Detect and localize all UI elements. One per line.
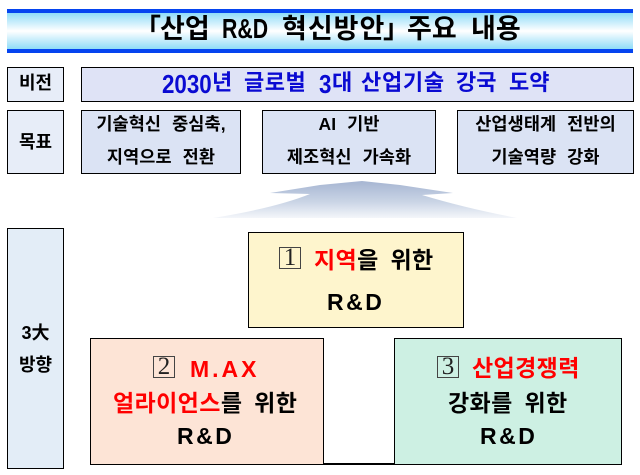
vision statement: 강국 bbox=[456, 70, 496, 95]
goal 2: AI 기반 bbox=[318, 114, 380, 134]
direction 1: regional R&D bbox=[248, 232, 464, 328]
label: vision bbox=[7, 67, 64, 102]
title banner: 주요 bbox=[407, 14, 457, 44]
vision statement: 산업기술 bbox=[361, 70, 445, 95]
vision statement: 2030 bbox=[162, 69, 212, 99]
direction 1: regional R&D: 지역을 위한 bbox=[314, 247, 434, 273]
title banner: R&D bbox=[222, 13, 268, 44]
direction 2: M.AX alliance R&D: 얼라이언스를 위한 bbox=[113, 390, 297, 416]
arrow: upward from directions to goals bbox=[215, 181, 515, 218]
goal 3: 산업생태계 전반의 bbox=[475, 114, 616, 134]
direction 3: industrial competitiveness R&D bbox=[394, 338, 622, 465]
vision statement bbox=[81, 67, 634, 102]
title banner: 산업 bbox=[160, 14, 210, 44]
vision statement: 글로벌 bbox=[244, 70, 306, 95]
title banner: 내용 bbox=[471, 14, 521, 44]
goal 1 bbox=[81, 110, 241, 174]
label: three directions bbox=[7, 228, 64, 469]
label: three directions: 3大 bbox=[21, 323, 50, 343]
goal 1: 지역으로 전환 bbox=[107, 147, 215, 167]
direction 3: industrial competitiveness R&D: 산업경쟁력 bbox=[472, 355, 580, 381]
vision statement: 3 bbox=[319, 69, 331, 99]
label: three directions: 방향 bbox=[19, 355, 52, 375]
title banner: 」 bbox=[383, 14, 410, 44]
title banner: 「 bbox=[134, 14, 161, 44]
direction 2: M.AX alliance R&D: 2 bbox=[158, 353, 170, 380]
vision statement: 대 bbox=[332, 70, 352, 95]
direction 2: M.AX alliance R&D: R&D bbox=[177, 423, 234, 449]
label: goals bbox=[7, 110, 64, 174]
title banner bbox=[7, 9, 633, 53]
direction 3: industrial competitiveness R&D: R&D bbox=[480, 423, 537, 449]
vision statement: 도약 bbox=[509, 70, 549, 95]
goal 2 bbox=[262, 110, 436, 174]
direction 1: regional R&D: R&D bbox=[327, 289, 384, 315]
title banner: 혁신방안 bbox=[282, 14, 385, 44]
label: vision: 비전 bbox=[19, 73, 52, 93]
label: goals: 목표 bbox=[19, 132, 52, 152]
goal 3: 기술역량 강화 bbox=[491, 147, 600, 167]
goal 2: 제조혁신 가속화 bbox=[287, 147, 411, 167]
goal 3 bbox=[457, 110, 634, 174]
direction 2: M.AX alliance R&D: M.AX bbox=[190, 356, 260, 382]
connector line bbox=[323, 463, 395, 464]
direction 2: M.AX alliance R&D bbox=[90, 338, 324, 465]
direction 3: industrial competitiveness R&D: 강화를 위한 bbox=[448, 390, 568, 416]
direction 1: regional R&D: 1 bbox=[284, 244, 296, 271]
goal 1: 기술혁신 중심축, bbox=[96, 114, 226, 134]
direction 3: industrial competitiveness R&D: 3 bbox=[442, 353, 454, 380]
vision statement: 년 bbox=[212, 70, 232, 95]
